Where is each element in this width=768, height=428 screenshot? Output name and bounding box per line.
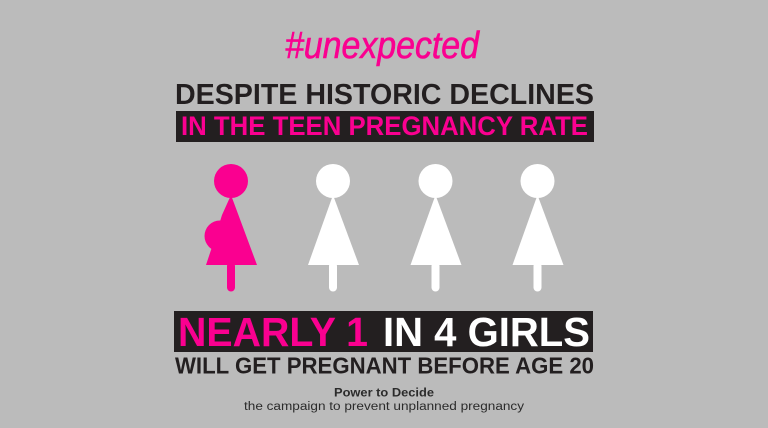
heading line 1: DESPITE HISTORIC DECLINES xyxy=(175,79,594,111)
statistic subtext: WILL GET PREGNANT BEFORE AGE 20 xyxy=(175,352,594,378)
statistic banner: NEARLY 1 xyxy=(178,309,368,355)
icon: girl 3 xyxy=(410,164,462,292)
statistic banner xyxy=(174,309,593,355)
hashtag title: #unexpected xyxy=(285,25,481,67)
statistic banner: IN 4 GIRLS xyxy=(383,309,590,355)
icon: girl 2 xyxy=(308,164,359,292)
heading line 2 banner: IN THE TEEN PREGNANCY RATE xyxy=(181,111,588,141)
icon: pregnant girl xyxy=(204,164,257,292)
source description: the campaign to prevent unplanned pregnancy xyxy=(244,401,524,413)
icon: girl 4 xyxy=(512,164,564,292)
source name: Power to Decide xyxy=(334,388,434,400)
